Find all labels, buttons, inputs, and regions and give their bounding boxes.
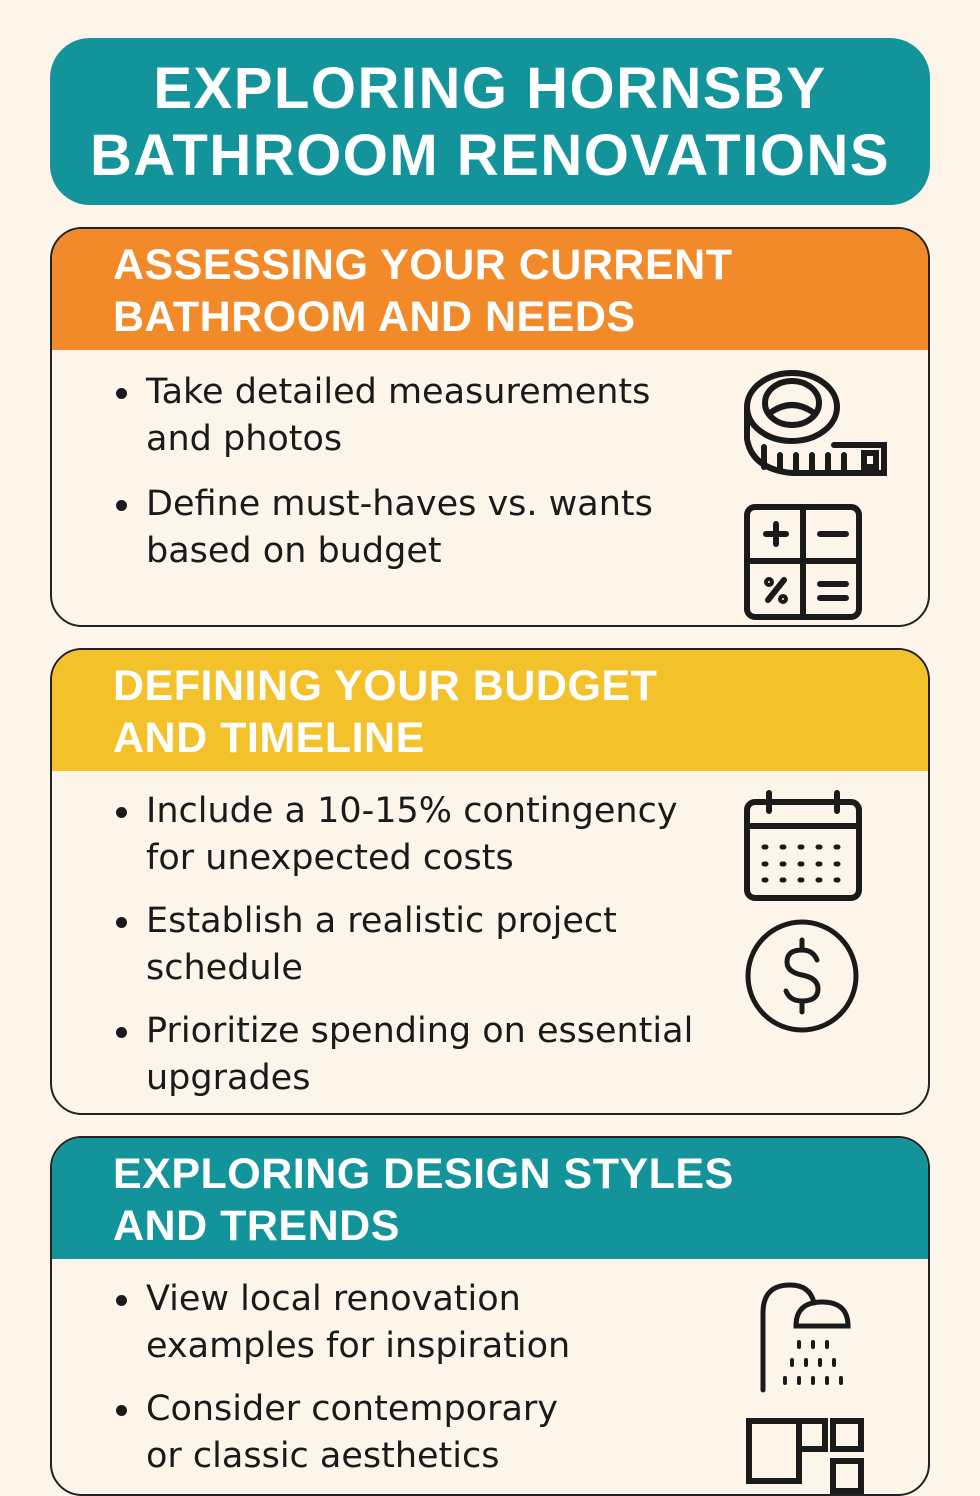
bullets: budget: Include a 10-15% contingency	[146, 791, 678, 831]
bullets: budget: schedule	[146, 948, 303, 988]
bullets: design	[116, 1279, 570, 1476]
heading: budget	[52, 650, 928, 771]
heading: budget: AND TIMELINE	[113, 714, 425, 762]
icon: shower	[760, 1282, 850, 1392]
panel: assessing	[50, 227, 930, 627]
icon: calculator	[744, 504, 862, 620]
bullets: budget: Prioritize spending on essential	[146, 1011, 693, 1051]
icon: dollar	[746, 920, 858, 1032]
icon: tape measure	[744, 370, 887, 476]
bullets: design: Consider contemporary	[146, 1389, 558, 1429]
heading: design: AND TRENDS	[113, 1202, 400, 1250]
bullets: assessing: Take detailed measurements	[146, 372, 650, 412]
heading: design: EXPLORING DESIGN STYLES	[113, 1150, 734, 1198]
bullets: assessing: Define must-haves vs. wants	[146, 484, 653, 524]
bullets: design: View local renovation	[146, 1279, 521, 1319]
icon: calendar	[744, 790, 862, 901]
bullets: budget: for unexpected costs	[146, 838, 514, 878]
bullets: design: or classic aesthetics	[146, 1436, 500, 1476]
bullets: assessing	[116, 372, 653, 571]
bullets: budget: Establish a realistic project	[146, 901, 617, 941]
heading: assessing: BATHROOM AND NEEDS	[113, 293, 636, 341]
title	[50, 38, 930, 205]
bullets: assessing: based on budget	[146, 531, 442, 571]
bullets: budget	[116, 791, 693, 1098]
title: BATHROOM RENOVATIONS	[90, 123, 890, 188]
title: EXPLORING HORNSBY	[153, 56, 827, 121]
heading: assessing	[52, 229, 928, 350]
heading: assessing: ASSESSING YOUR CURRENT	[113, 241, 732, 289]
bullets: budget: upgrades	[146, 1058, 310, 1098]
bullets: assessing: and photos	[146, 419, 342, 459]
icon: tiles	[746, 1418, 864, 1494]
bullets: design: examples for inspiration	[146, 1326, 570, 1366]
heading: design	[52, 1138, 928, 1259]
panel: budget	[50, 648, 930, 1115]
panel: design	[50, 1136, 930, 1496]
heading: budget: DEFINING YOUR BUDGET	[113, 662, 657, 710]
